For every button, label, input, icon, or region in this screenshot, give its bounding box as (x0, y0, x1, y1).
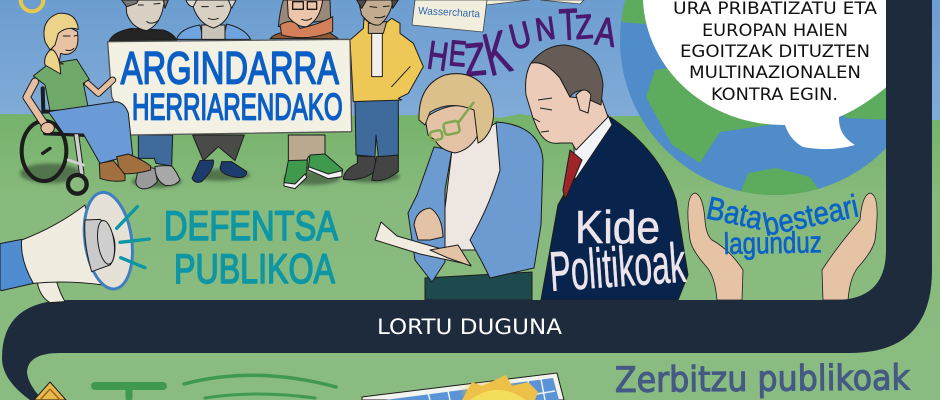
icon: road sign (34, 382, 66, 400)
icon: solar panel with sun (362, 373, 564, 400)
globe (620, 0, 886, 195)
label: Kide Politikoak: Politikoak (547, 231, 688, 303)
green lettering strokes (95, 375, 336, 398)
speech bubble text: KONTRA EGIN. (711, 85, 838, 105)
banner text (121, 42, 343, 127)
heading: HEZKUNTZA: A (593, 9, 619, 56)
politician in suit (526, 45, 688, 303)
person in wheelchair (22, 13, 151, 194)
icon: megaphone (0, 189, 149, 303)
banner (108, 39, 352, 135)
label: Kide Politikoak (547, 201, 688, 303)
speech bubble text: EGOITZAK DITUZTEN (680, 42, 870, 62)
person with blue cardigan (177, 0, 251, 182)
heading: HEZKUNTZA: H (425, 34, 451, 80)
heading: HEZKUNTZA: U (505, 13, 535, 58)
text: Zerbitzu publikoak: Zerbitzu publikoak (615, 358, 911, 400)
foot shadows (20, 163, 400, 188)
person with orange scarf (270, 0, 343, 189)
text: Bata besteari lagunduz (704, 188, 861, 261)
text: DEFENTSA PUBLIKOA (164, 202, 338, 292)
speech bubble (643, 0, 900, 149)
notice papers: Wassercharta (418, 5, 481, 20)
road label: LORTU DUGUNA (377, 315, 563, 339)
speech bubble text: EUROPAN HAIEN (702, 21, 848, 41)
person with black shirt (109, 0, 180, 189)
text: Bata besteari lagunduz: besteari (760, 188, 861, 243)
sky background (0, 0, 940, 125)
text: DEFENTSA PUBLIKOA: DEFENTSA (164, 202, 338, 249)
notice papers (412, 0, 584, 32)
people with banner (20, 0, 423, 194)
icon: hands with text (688, 188, 877, 300)
heading: HEZKUNTZA: N (533, 11, 558, 48)
text: DEFENTSA PUBLIKOA: PUBLIKOA (174, 245, 335, 292)
speech bubble text (673, 0, 877, 105)
banner text: ARGINDARRA (121, 42, 340, 93)
banner text: HERRIARENDAKO (132, 85, 343, 127)
heading: HEZKUNTZA: K (477, 18, 517, 89)
heading: HEZKUNTZA (425, 1, 619, 89)
open book (375, 222, 471, 265)
speech bubble text: MULTINAZIONALEN (689, 63, 861, 83)
ring icon (21, 0, 43, 11)
label: Kide Politikoak: Kide (575, 201, 660, 253)
person with yellow jacket (343, 0, 423, 181)
text: Bata besteari lagunduz: lagunduz (724, 226, 822, 261)
glasses (429, 102, 474, 141)
heading: HEZKUNTZA: T (558, 1, 579, 50)
heading: HEZKUNTZA: E (447, 33, 468, 75)
heading: HEZKUNTZA: Z (574, 7, 594, 47)
heading: HEZKUNTZA: Z (462, 32, 488, 86)
grass background (0, 114, 940, 400)
person with glasses reading (375, 74, 543, 300)
text: Bata besteari lagunduz: Bata (704, 190, 766, 237)
